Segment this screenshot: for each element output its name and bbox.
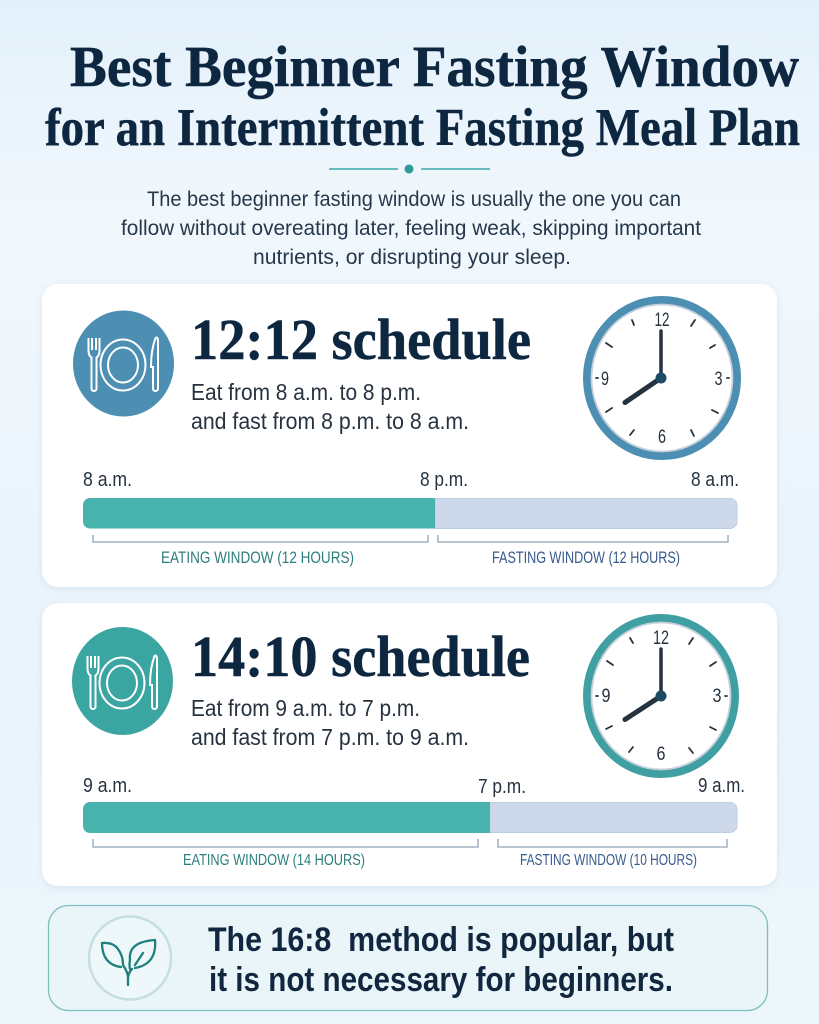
timeline labels: 9 a.m. bbox=[83, 775, 132, 797]
timeline labels: 8 a.m. bbox=[691, 469, 739, 491]
icon: plate and cutlery bbox=[72, 627, 173, 735]
eating bracket bbox=[93, 535, 428, 542]
schedule heading: 12:12 schedule bbox=[191, 307, 531, 372]
timeline labels: 8 p.m. bbox=[420, 469, 468, 491]
schedule description bbox=[191, 695, 469, 750]
clock: 6 bbox=[656, 743, 666, 765]
clock: 9 bbox=[601, 369, 609, 390]
schedule description: and fast from 7 p.m. to 9 a.m. bbox=[191, 724, 469, 750]
timeline bar bbox=[83, 498, 737, 528]
clock bbox=[587, 618, 735, 774]
timeline labels: 9 a.m. bbox=[698, 775, 745, 797]
fasting bracket bbox=[438, 535, 728, 542]
fasting bracket bbox=[498, 839, 727, 847]
eating bracket bbox=[93, 839, 478, 847]
eating label: EATING WINDOW (12 HOURS) bbox=[161, 549, 354, 567]
clock: 6 bbox=[658, 427, 666, 448]
card background bbox=[42, 603, 777, 886]
timeline labels: 7 p.m. bbox=[478, 776, 526, 798]
callout: 16:8 note bbox=[48, 906, 768, 1010]
callout text: it is not necessary for beginners. bbox=[209, 961, 673, 999]
schedule description: Eat from 8 a.m. to 8 p.m. bbox=[191, 379, 421, 405]
intro text: nutrients, or disrupting your sleep. bbox=[253, 246, 571, 269]
callout text bbox=[208, 921, 674, 999]
title bbox=[45, 34, 800, 157]
intro text: The best beginner fasting window is usually the one you can bbox=[147, 188, 681, 211]
intro text bbox=[121, 188, 701, 269]
timeline labels bbox=[83, 469, 739, 491]
fasting label: FASTING WINDOW (10 HOURS) bbox=[520, 852, 697, 869]
intro text: follow without overeating later, feeling weak, skipping important bbox=[121, 217, 701, 240]
schedule description: Eat from 9 a.m. to 7 p.m. bbox=[191, 695, 420, 721]
fasting label: FASTING WINDOW (12 HOURS) bbox=[492, 549, 680, 567]
panel: 14:10 schedule bbox=[42, 603, 777, 886]
icon: leaf sprout bbox=[89, 916, 171, 1000]
clock: 3 bbox=[712, 685, 722, 707]
title: Best Beginner Fasting Window bbox=[70, 34, 799, 99]
callout box bbox=[48, 906, 768, 1010]
panel: 12:12 schedule bbox=[42, 284, 777, 587]
eating label: EATING WINDOW (14 HOURS) bbox=[183, 852, 365, 869]
timeline labels: 8 a.m. bbox=[83, 469, 132, 491]
clock bbox=[587, 300, 737, 456]
clock: 12 bbox=[653, 627, 669, 649]
icon: plate and cutlery bbox=[73, 310, 174, 416]
clock: 3 bbox=[714, 369, 722, 390]
timeline bar bbox=[83, 802, 737, 833]
clock: 9 bbox=[602, 685, 610, 707]
title divider bbox=[329, 164, 490, 174]
timeline labels bbox=[83, 775, 745, 798]
clock: 12 bbox=[654, 310, 670, 331]
card background bbox=[42, 284, 777, 587]
schedule description bbox=[191, 379, 469, 434]
schedule heading: 14:10 schedule bbox=[191, 624, 530, 689]
schedule description: and fast from 8 p.m. to 8 a.m. bbox=[191, 408, 469, 434]
callout text: The 16:8 method is popular, but bbox=[208, 921, 674, 959]
